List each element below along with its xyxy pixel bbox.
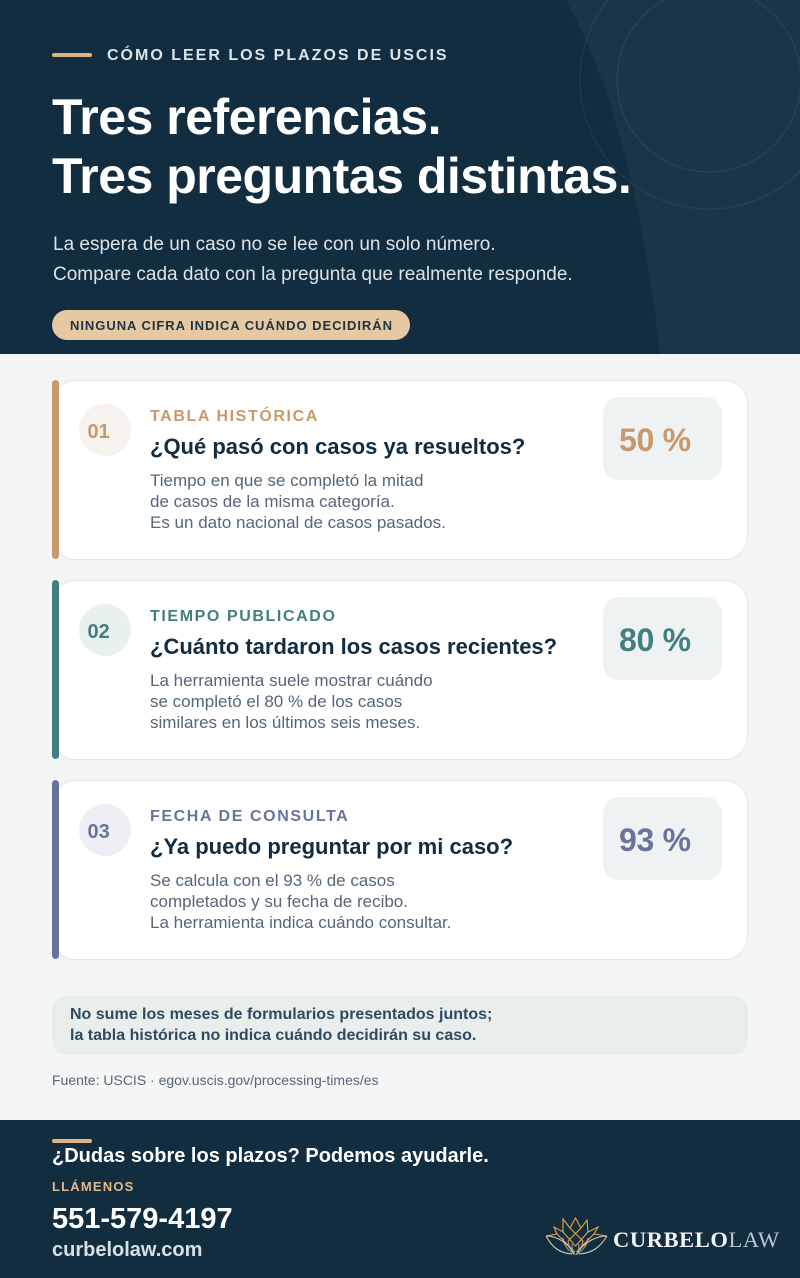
accent bar <box>52 780 59 959</box>
description: Es un dato nacional de casos pasados. <box>150 513 446 532</box>
description <box>150 471 446 532</box>
footer heading: ¿Dudas sobre los plazos? Podemos ayudarle. <box>52 1145 489 1167</box>
card background <box>52 580 748 760</box>
accent bar <box>52 380 59 559</box>
category label: FECHA DE CONSULTA <box>150 808 349 825</box>
panel: card 01 <box>52 380 748 560</box>
description: completados y su fecha de recibo. <box>150 892 408 911</box>
subtitle <box>53 234 573 285</box>
description <box>150 871 451 932</box>
percent box <box>603 397 722 480</box>
category label: TABLA HISTÓRICA <box>150 408 319 425</box>
title: Tres referencias. <box>52 89 441 145</box>
question: ¿Ya puedo preguntar por mi caso? <box>150 834 513 859</box>
footer panel <box>0 1120 800 1278</box>
description: Tiempo en que se completó la mitad <box>150 471 423 490</box>
description: similares en los últimos seis meses. <box>150 713 420 732</box>
description: se completó el 80 % de los casos <box>150 692 402 711</box>
callout: la tabla histórica no indica cuándo decidirán su caso. <box>70 1027 476 1044</box>
number badge: 01 <box>88 421 110 443</box>
percent box: 93 % <box>619 822 691 858</box>
callout <box>52 996 748 1055</box>
decorative background shape <box>566 0 800 354</box>
description: de casos de la misma categoría. <box>150 492 395 511</box>
percent box <box>603 597 722 680</box>
card background <box>52 380 748 560</box>
question: ¿Cuánto tardaron los casos recientes? <box>150 634 557 659</box>
website: curbelolaw.com <box>52 1239 202 1261</box>
description: La herramienta suele mostrar cuándo <box>150 671 433 690</box>
percent box <box>603 797 722 880</box>
header panel <box>0 0 800 354</box>
footer rule <box>52 1139 92 1143</box>
description <box>150 671 433 732</box>
number badge: 02 <box>88 621 110 643</box>
logo <box>546 1217 780 1256</box>
category label: TIEMPO PUBLICADO <box>150 608 336 625</box>
title: Tres preguntas distintas. <box>52 148 631 204</box>
question: ¿Qué pasó con casos ya resueltos? <box>150 434 525 459</box>
accent bar <box>52 580 59 759</box>
subtitle: La espera de un caso no se lee con un solo número. <box>53 234 496 255</box>
icon: lotus <box>546 1217 608 1256</box>
source note: Fuente: USCIS · egov.uscis.gov/processing-times/es <box>52 1072 379 1088</box>
callout: No sume los meses de formularios presentados juntos; <box>70 1006 492 1023</box>
call label: LLÁMENOS <box>52 1179 135 1194</box>
badge: NINGUNA CIFRA INDICA CUÁNDO DECIDIRÁN <box>70 318 393 333</box>
number badge <box>79 404 131 456</box>
eyebrow text: CÓMO LEER LOS PLAZOS DE USCIS <box>107 47 449 64</box>
panel: card 03 <box>52 780 748 960</box>
percent box: 50 % <box>619 422 691 458</box>
subtitle: Compare cada dato con la pregunta que realmente responde. <box>53 264 573 285</box>
wordmark: CURBELOLAW <box>613 1227 780 1252</box>
percent box: 80 % <box>619 622 691 658</box>
number badge: 03 <box>88 821 110 843</box>
number badge <box>79 604 131 656</box>
eyebrow rule <box>52 53 92 57</box>
card background <box>52 780 748 960</box>
description: La herramienta indica cuándo consultar. <box>150 913 451 932</box>
badge <box>52 310 410 340</box>
panel: card 02 <box>52 580 748 760</box>
phone number: 551-579-4197 <box>52 1203 233 1235</box>
title <box>52 89 631 204</box>
description: Se calcula con el 93 % de casos <box>150 871 395 890</box>
number badge <box>79 804 131 856</box>
